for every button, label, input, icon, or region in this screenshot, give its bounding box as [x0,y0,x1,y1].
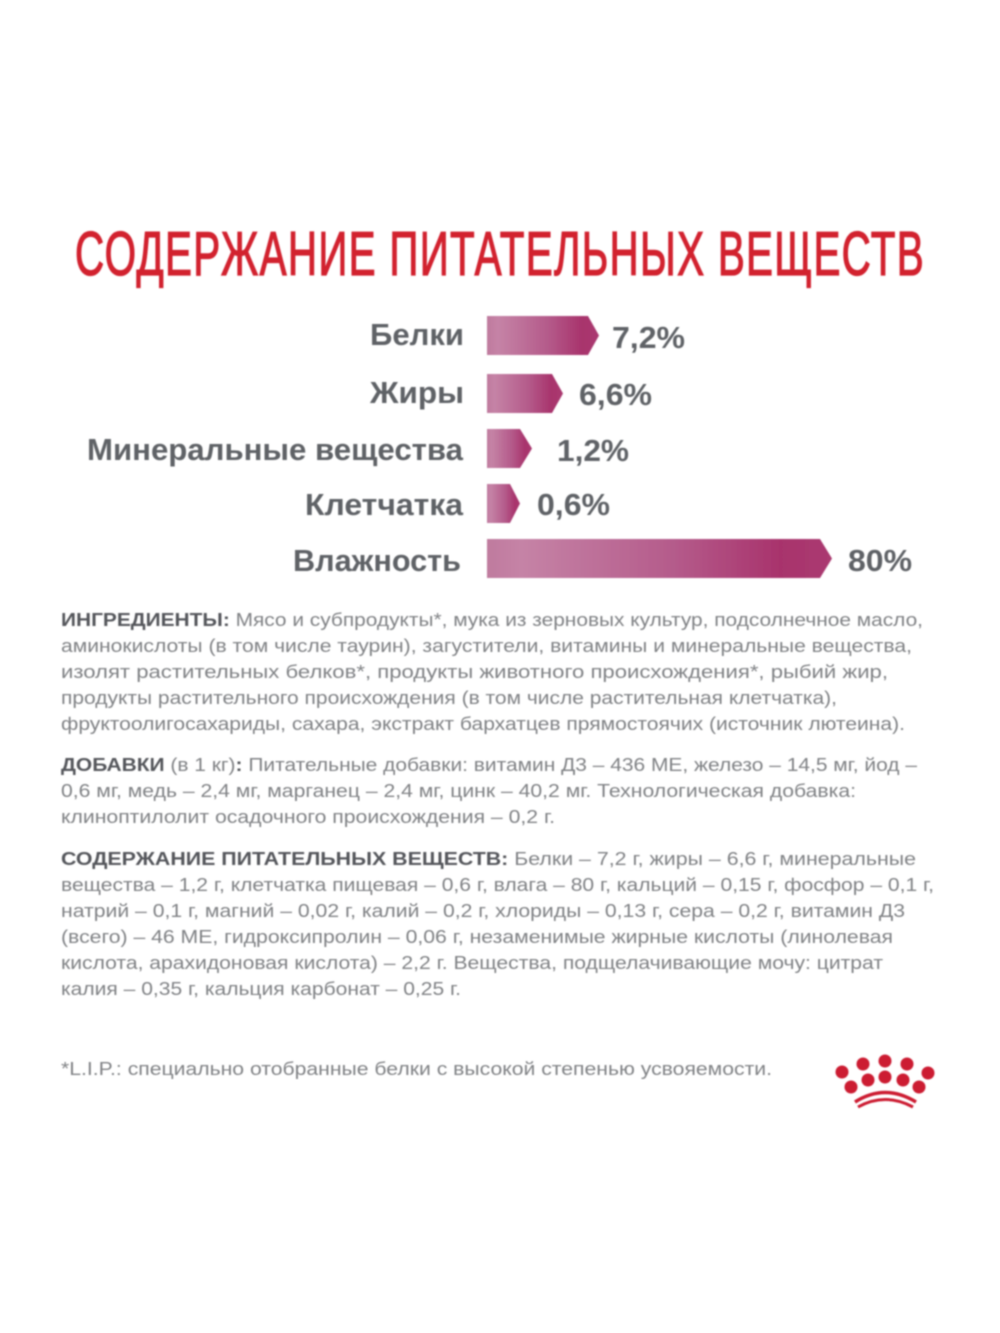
row: moisture [293,539,912,578]
text block: ingredients: фруктоолигосахариды, сахара, экстракт бархатцев прямостоячих (источник лютеина). [61,714,905,734]
icon: royal canin crown logo [836,1054,934,1107]
row: fibre: Клетчатка [305,487,464,522]
text block: ingredients: продукты растительного происхождения (в том числе растительная клетчатка), [61,688,837,708]
text block: nutrient content: калия – 0,35 г, кальция карбонат – 0,25 г. [61,979,461,999]
row: proteins: Белки [370,317,464,352]
text block: additives: ДОБАВКИ (в 1 кг) : Питательные добавки: витамин Д3 – 436 МЕ, железо – 14,5 мг, йод – [61,755,917,775]
text block: nutrient content: СОДЕРЖАНИЕ ПИТАТЕЛЬНЫХ ВЕЩЕСТВ: Белки – 7,2 г, жиры – 6,6 г, минеральные [61,849,916,869]
text block: ingredients: ИНГРЕДИЕНТЫ: Мясо и субпродукты*, мука из зерновых культур, подсолнечное масло, [61,610,923,630]
row: fibre [305,484,610,523]
row: fibre: 0,6% [537,487,610,522]
footnote: *L.I.P.: специально отобранные белки с высокой степенью усвояемости. [61,1059,772,1079]
text block: nutrient content [61,849,934,999]
text block: additives [61,755,917,827]
row: fats: 6,6% [579,377,652,412]
text block: nutrient content: кислота, арахидоновая кислота) – 2,2 г. Вещества, подщелачивающие мочу: цитрат [61,953,883,973]
bar chart: nutrient content [87,316,912,578]
text block: nutrient content: (всего) – 46 МЕ, гидроксипролин – 0,06 г, незаменимые жирные кислоты (линолевая [61,927,893,947]
text block: nutrient content: натрий – 0,1 г, магний – 0,02 г, калий – 0,2 г, хлориды – 0,13 г, сера – 0,2 г, витамин Д3 [61,901,905,921]
row: minerals: Минеральные вещества [87,432,464,467]
row: proteins: 7,2% [612,320,685,355]
row: minerals [87,429,629,468]
text block: ingredients: аминокислоты (в том числе таурин), загустители, витамины и минеральные вещества, [61,636,912,656]
text block: ingredients: изолят растительных белков*, продукты животного происхождения*, рыбий жир, [61,662,888,682]
row: moisture: 80% [848,543,912,578]
row: fats: Жиры [369,375,464,410]
row: minerals: 1,2% [557,433,629,468]
text block: nutrient content: вещества – 1,2 г, клетчатка пищевая – 0,6 г, влага – 80 г, кальций – 0,15 г, фосфор – 0,1 г, [61,875,934,895]
row: moisture: Влажность [293,543,461,578]
text block: ingredients [61,610,923,734]
text block: additives: 0,6 мг, медь – 2,4 мг, марганец – 2,4 мг, цинк – 40,2 мг. Технологическая добавка: [61,781,856,801]
row: fats [369,374,652,413]
text block: additives: клиноптилолит осадочного происхождения – 0,2 г. [61,807,555,827]
row: proteins [370,316,685,355]
